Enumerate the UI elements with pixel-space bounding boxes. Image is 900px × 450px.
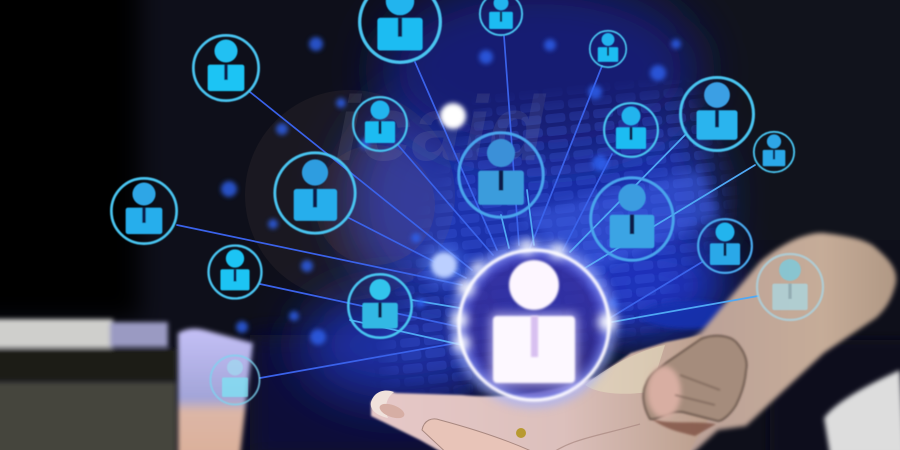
background: grey desk at lower left	[0, 319, 176, 450]
hand: palm and fingers	[371, 335, 720, 450]
central hub: glowing person in ring	[452, 240, 616, 402]
person node: upper right large	[681, 78, 753, 150]
person node: left middle large	[275, 153, 355, 233]
person node: centre large	[459, 133, 543, 217]
hand: thumb	[643, 336, 747, 421]
person node: right lower	[698, 219, 752, 273]
person node: far left	[111, 178, 177, 244]
background: white surface at lower right	[824, 370, 900, 450]
background: paper cup	[178, 329, 253, 450]
network: person nodes	[111, 0, 823, 405]
person node: top centre left	[360, 0, 440, 62]
watermark: faint lens flare and lettering	[245, 78, 546, 300]
person node: faded on cup	[210, 356, 260, 404]
background: blue keyboard glow	[300, 0, 740, 400]
forearm	[600, 233, 896, 450]
hand: shadow under thumb	[648, 416, 716, 436]
person node: faded on forearm	[757, 254, 823, 320]
person node: top centre	[480, 0, 522, 35]
person node: upper middle right	[604, 103, 658, 157]
person node: left lower	[209, 246, 261, 298]
person node: top left	[193, 35, 259, 101]
person node: upper middle left	[353, 97, 407, 151]
person node: top right small	[590, 31, 626, 67]
network connection lines	[177, 36, 758, 378]
person node: next to centre hub	[348, 274, 412, 338]
person node: right middle large	[591, 178, 673, 260]
watermark: faint lens flare and lettering: icaid	[335, 78, 546, 180]
person node: far right small	[754, 132, 794, 172]
glowing blue dots	[221, 37, 681, 345]
bright light orbs	[422, 103, 466, 287]
